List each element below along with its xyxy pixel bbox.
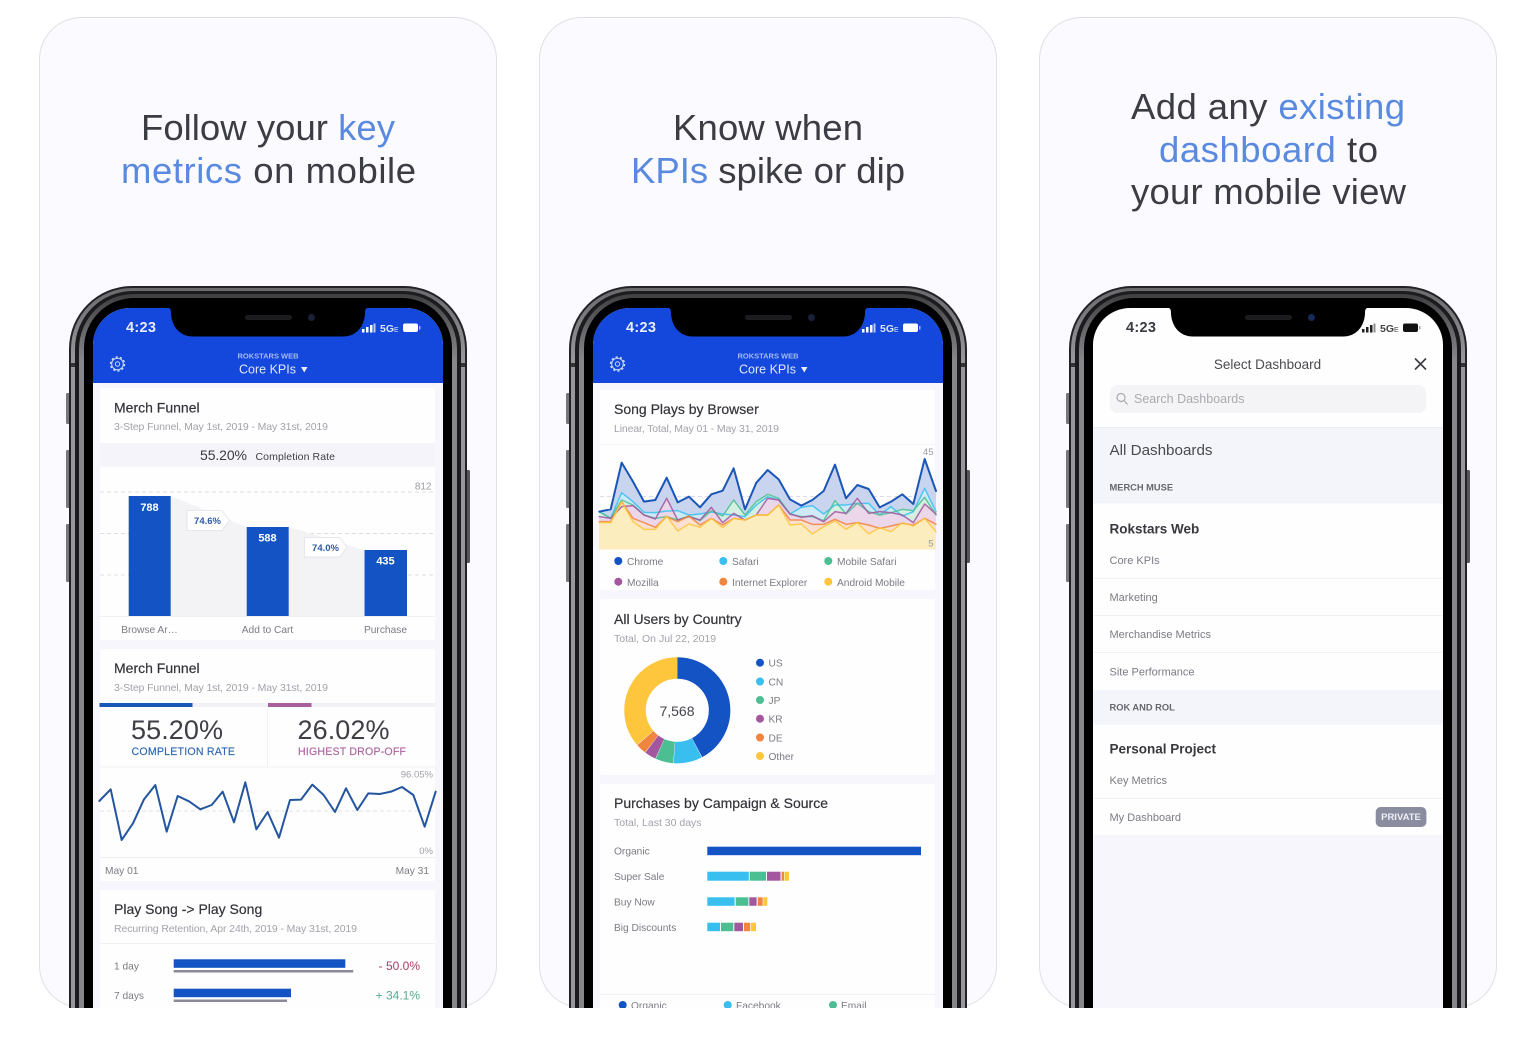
area chart: 45 (923, 447, 934, 458)
stacked bars: Organic (614, 846, 650, 858)
stat tabs: 55.20% (131, 715, 223, 745)
card: song plays by browser (599, 390, 936, 590)
phone frame (1066, 286, 1470, 1008)
heading: add any existing dashboard: dashboard to (1159, 129, 1378, 170)
stacked bars: Big Discounts (614, 923, 676, 934)
funnel chart: 74.0% (312, 543, 340, 554)
funnel chart: 812 (415, 482, 432, 492)
card: play song retention: Play Song -> Play Song (114, 901, 262, 917)
dashboard selector: ROKSTARS WEB (737, 352, 799, 360)
card: merch funnel bars: 3-Step Funnel, May 1st, 2019 - May 31st, 2019 (114, 421, 328, 433)
stat tabs (100, 703, 436, 767)
legend: sources (618, 1001, 866, 1008)
card: purchases by campaign and source: Purchases by Campaign & Source (614, 795, 828, 811)
phone 3: select dashboard (1066, 286, 1470, 1008)
search field (1110, 385, 1426, 413)
status bar: E (894, 327, 899, 334)
dashboard selector (738, 354, 808, 374)
legend: countries: JP (768, 696, 781, 707)
legend: countries: DE (768, 734, 783, 744)
dashboard selector: Core KPIs (739, 362, 796, 376)
status bar (1126, 322, 1420, 332)
search field: Search Dashboards (1134, 392, 1244, 406)
group header: rok and rol: ROK AND ROL (1110, 702, 1175, 712)
dashboard selector: Core KPIs (239, 362, 296, 376)
legend: sources: Facebook (736, 1001, 782, 1012)
completion rate band (100, 443, 435, 466)
dashboard list: personal project: Key Metrics (1110, 775, 1167, 787)
legend: browsers: Safari (732, 557, 759, 568)
retention row: 7 days: + 34.1% (376, 988, 420, 1002)
dashboard selector (238, 354, 308, 374)
card: all users by country: All Users by Country (614, 611, 742, 627)
card: all users by country (614, 614, 794, 764)
card: song plays by browser: Song Plays by Browser (614, 401, 759, 417)
panel: know when KPIs spike (540, 18, 996, 1008)
group header: merch muse: MERCH MUSE (1110, 482, 1173, 492)
retention row: 1 day: - 50.0% (379, 959, 420, 973)
status bar: 5G (380, 323, 394, 335)
card: song plays by browser: Linear, Total, May 01 - May 31, 2019 (614, 423, 779, 435)
card: merch funnel line: Merch Funnel (114, 660, 200, 676)
retention row: 1 day (114, 959, 420, 973)
icon: close (1415, 358, 1426, 370)
notch (168, 308, 368, 336)
empty list background (1093, 835, 1443, 1008)
card: merch funnel bars: Merch Funnel (114, 400, 200, 416)
legend: sources: Email (841, 1001, 866, 1012)
legend: browsers: Mobile Safari (837, 557, 896, 568)
stat tabs: HIGHEST DROP-OFF (298, 746, 407, 758)
phone frame (566, 286, 970, 1008)
legend: browsers: Chrome (627, 557, 664, 568)
line chart: May 01 (105, 866, 139, 877)
card: purchases by campaign and source: Total, Last 30 days (614, 817, 702, 829)
retention row: 1 day: 1 day (114, 962, 140, 972)
status bar: 4:23 (626, 320, 656, 336)
legend: countries: Other (768, 752, 795, 763)
phone 2: KPI alerts (566, 286, 970, 1012)
heading: add any existing dashboard: your mobile view (1131, 171, 1407, 212)
notch (1168, 308, 1368, 336)
status bar: 4:23 (126, 320, 156, 336)
phone frame (66, 286, 470, 1008)
legend: countries: US (768, 659, 783, 670)
funnel chart: Purchase (364, 625, 407, 636)
card: play song retention: Recurring Retention, Apr 24th, 2019 - May 31st, 2019 (114, 923, 357, 935)
completion rate band: 55.20% (200, 447, 247, 463)
heading: follow your key metrics: Follow your key (141, 107, 396, 148)
icon: settings gear (610, 357, 624, 371)
app header bar (593, 308, 943, 383)
retention row: 7 days: 7 days (114, 991, 144, 1002)
funnel chart: Browse Ar… (121, 625, 178, 636)
heading: know when KPIs spike or dip (631, 107, 905, 191)
group header: rok and rol (1093, 690, 1443, 724)
app header bar (93, 308, 443, 383)
line chart: May 31 (396, 866, 429, 877)
dashboard list: personal project: My Dashboard (1110, 812, 1181, 824)
dashboard list: rokstars web: Marketing (1110, 592, 1158, 604)
dashboard list: rokstars web: Core KPIs (1110, 555, 1160, 567)
legend: countries: KR (768, 715, 783, 726)
modal title: Select Dashboard (1214, 357, 1321, 372)
funnel chart: Add to Cart (242, 625, 293, 636)
heading: follow your key metrics: metrics on mobile (121, 150, 416, 191)
legend: countries: CN (768, 678, 783, 688)
card: merch funnel line: 3-Step Funnel, May 1st, 2019 - May 31st, 2019 (114, 682, 328, 694)
icon: settings gear (110, 357, 124, 371)
funnel chart (100, 482, 435, 636)
screen (593, 304, 943, 1012)
heading: know when KPIs spike or dip: Know when (673, 107, 863, 148)
area chart (599, 447, 936, 550)
dashboard list: personal project: Personal Project (1110, 742, 1217, 756)
retention row: 7 days (114, 988, 420, 1002)
legend: browsers (614, 557, 905, 589)
legend: browsers: Android Mobile (837, 578, 905, 589)
dashboard list: rokstars web: Rokstars Web (1110, 522, 1199, 536)
group header: merch muse: All Dashboards (1110, 442, 1213, 459)
stacked bars: Super Sale (614, 872, 665, 883)
status bar: E (1394, 327, 1399, 334)
line chart: 96.05% (401, 770, 434, 780)
stacked bars: Buy Now (614, 898, 655, 908)
dashboard list: personal project (1093, 742, 1443, 827)
badge: private (1376, 807, 1426, 827)
panel: add any dashboard (1040, 18, 1496, 1008)
heading: follow your key metrics (121, 107, 416, 191)
card: merch funnel line (99, 649, 436, 881)
funnel chart: 588 (258, 532, 277, 544)
dashboard list: rokstars web: Site Performance (1110, 666, 1194, 678)
dashboard selector: ROKSTARS WEB (237, 352, 299, 360)
legend: browsers: Internet Explorer (732, 578, 808, 589)
legend: countries (756, 659, 795, 763)
line chart: 0% (419, 846, 434, 857)
group header: merch muse (1093, 427, 1443, 504)
card: purchases by campaign and source (614, 798, 921, 1008)
phone 1: key metrics (66, 286, 470, 1008)
status bar: 5G (880, 323, 894, 335)
status bar: E (394, 327, 399, 334)
dashboard list: rokstars web: Merchandise Metrics (1110, 629, 1211, 641)
heading: add any existing dashboard (1131, 86, 1407, 212)
stat tabs: COMPLETION RATE (132, 746, 235, 758)
area chart: 5 (928, 538, 934, 550)
line chart (99, 770, 436, 877)
card: merch funnel bars (100, 388, 435, 640)
badge: private: PRIVATE (1381, 812, 1421, 823)
legend: browsers: Mozilla (627, 578, 659, 589)
funnel chart: 788 (140, 502, 159, 514)
heading: know when KPIs spike or dip: KPIs spike or dip (631, 150, 905, 191)
stacked bars (614, 846, 921, 934)
card: all users by country: Total, On Jul 22, 2019 (614, 633, 716, 645)
stat tabs: 26.02% (298, 715, 390, 745)
donut chart: 7,568 (659, 703, 695, 719)
donut chart (635, 668, 720, 753)
completion rate band: Completion Rate (256, 451, 335, 463)
funnel chart: 435 (376, 556, 395, 568)
heading: add any existing dashboard: Add any existing (1131, 86, 1405, 127)
status bar: 5G (1380, 323, 1394, 335)
funnel chart: 74.6% (194, 516, 222, 527)
notch (668, 308, 868, 336)
card: play song retention (114, 904, 420, 1002)
panel: follow key metrics (40, 18, 496, 1008)
status bar (626, 322, 920, 332)
status bar: 4:23 (1126, 320, 1156, 336)
screen (1093, 304, 1443, 1008)
status bar (126, 322, 420, 332)
legend: sources: Organic (631, 1001, 667, 1012)
dashboard list: rokstars web (1093, 522, 1443, 678)
screen (93, 304, 443, 1008)
